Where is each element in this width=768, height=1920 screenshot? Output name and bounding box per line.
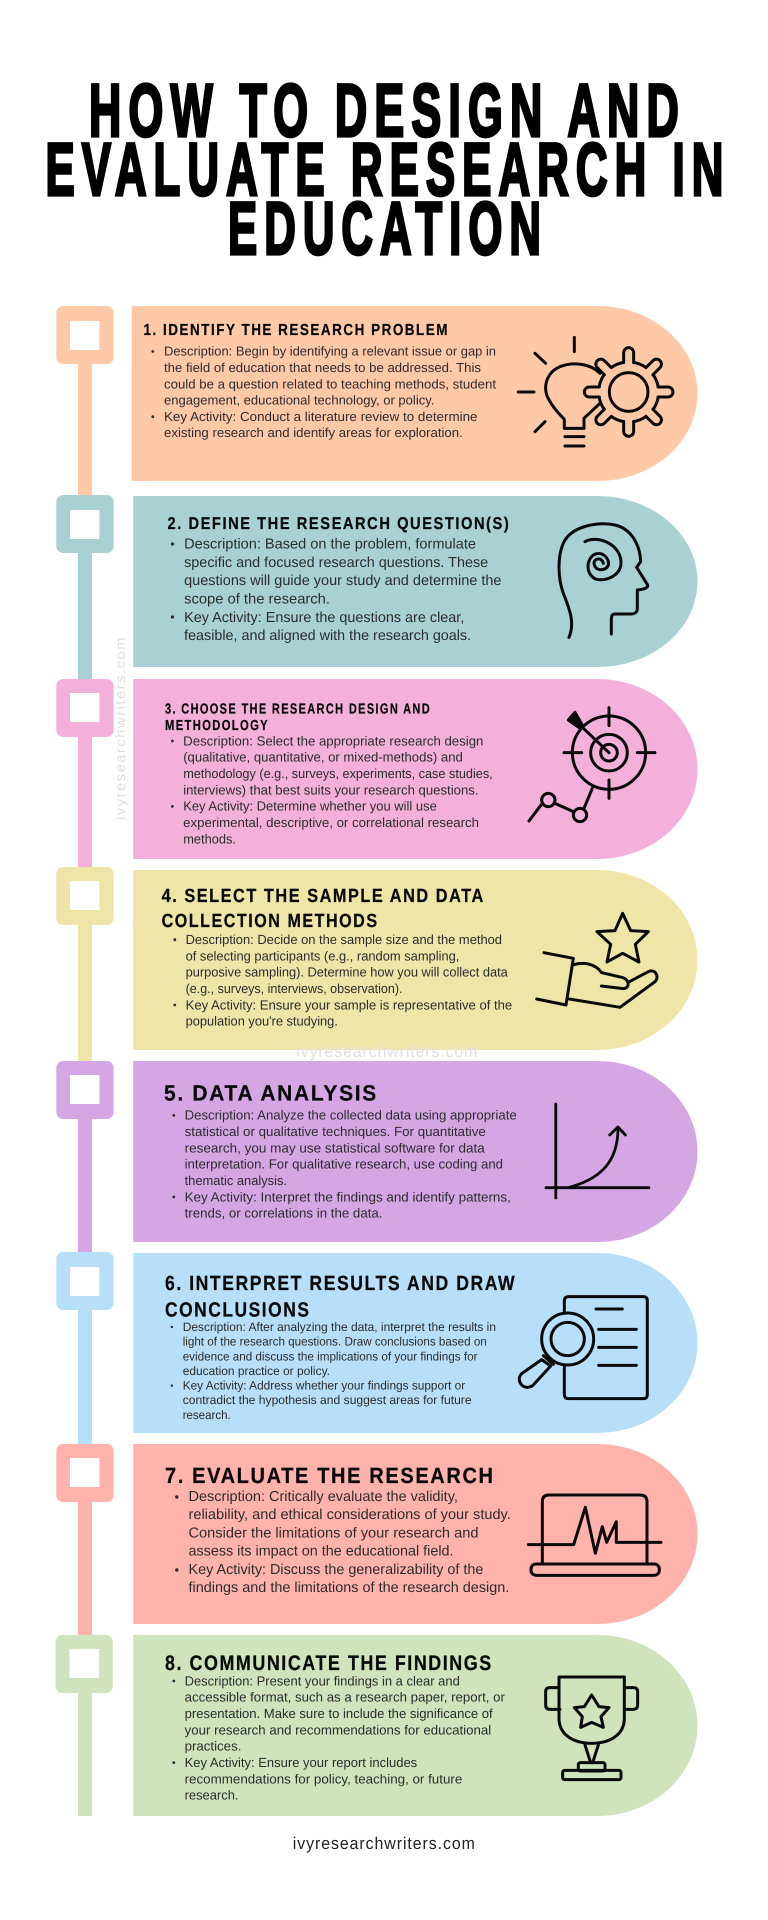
icon: head with spiral bbox=[559, 524, 648, 637]
panel: step 5 data analysis bbox=[133, 1061, 697, 1242]
text block: step 4: Key Activity: Ensure your sample is representative of the bbox=[186, 997, 512, 1012]
text block: step 6: Description: After analyzing the data, interpret the results in bbox=[183, 1320, 496, 1334]
text block: step 6: Key Activity: Address whether your findings support or bbox=[183, 1379, 465, 1393]
text block: step 2: Description: Based on the problem, formulate bbox=[184, 537, 476, 553]
heading: step 3: METHODOLOGY bbox=[165, 718, 269, 734]
heading: step 8: 8. COMMUNICATE THE FINDINGS bbox=[165, 1652, 493, 1675]
text block: step 4: Description: Decide on the sample size and the method bbox=[186, 932, 502, 947]
text block: step 6: evidence and discuss the implications of your findings for bbox=[183, 1349, 477, 1363]
panel: step 7 evaluate the research bbox=[133, 1444, 697, 1624]
heading: step 4 bbox=[162, 886, 485, 932]
icon: hand holding star bbox=[537, 913, 657, 1007]
text block: step 3: interviews) that best suits your research questions. bbox=[183, 782, 478, 797]
text block: step 4: of selecting participants (e.g., random sampling, bbox=[186, 948, 459, 963]
timeline bbox=[56, 306, 114, 1816]
heading: step 4: 4. SELECT THE SAMPLE AND DATA bbox=[162, 886, 485, 907]
text block: step 1: Key Activity: Conduct a literature review to determine bbox=[164, 409, 478, 424]
text block: step 5: statistical or qualitative techniques. For quantitative bbox=[185, 1124, 486, 1139]
text block: step 8: Key Activity: Ensure your report includes bbox=[185, 1755, 418, 1770]
icon: lightbulb and gear bbox=[518, 337, 673, 446]
heading: step 6: CONCLUSIONS bbox=[165, 1299, 310, 1322]
text block: step 6 bbox=[171, 1320, 496, 1422]
text block: step 7: findings and the limitations of the research design. bbox=[188, 1580, 509, 1596]
text block: step 7: Key Activity: Discuss the generalizability of the bbox=[188, 1562, 483, 1578]
panel: step 1 identify the research problem bbox=[132, 306, 697, 481]
text block: step 8 bbox=[172, 1673, 506, 1803]
text block: step 1 bbox=[151, 344, 496, 440]
panel: step 3 choose the research design and methodology bbox=[133, 679, 697, 859]
icon: laptop with pulse bbox=[528, 1495, 661, 1575]
text block: step 3: Key Activity: Determine whether you will use bbox=[183, 799, 437, 814]
text block: step 2: feasible, and aligned with the research goals. bbox=[184, 628, 471, 644]
text block: step 8: recommendations for policy, teaching, or future bbox=[185, 1771, 462, 1786]
text block: step 6: education practice or policy. bbox=[183, 1364, 330, 1378]
heading: step 3: 3. CHOOSE THE RESEARCH DESIGN AND bbox=[165, 702, 431, 718]
heading: step 5: 5. DATA ANALYSIS bbox=[164, 1081, 378, 1106]
title: EDUCATION bbox=[228, 187, 548, 270]
text block: step 5: trends, or correlations in the data. bbox=[185, 1206, 382, 1221]
text block: step 8: presentation. Make sure to include the significance of bbox=[185, 1706, 493, 1721]
text block: step 8: Description: Present your findings in a clear and bbox=[185, 1673, 460, 1688]
text block: step 3 bbox=[171, 733, 493, 846]
text block: step 8: accessible format, such as a research paper, report, or bbox=[185, 1690, 506, 1705]
text block: step 6: research. bbox=[183, 1408, 231, 1422]
text block: step 8: your research and recommendations for educational bbox=[185, 1722, 491, 1737]
text block: step 5: Description: Analyze the collected data using appropriate bbox=[185, 1108, 517, 1123]
text block: step 5: interpretation. For qualitative research, use coding and bbox=[185, 1157, 503, 1172]
text block: step 5: Key Activity: Interpret the findings and identify patterns, bbox=[185, 1189, 511, 1204]
icon: growth chart bbox=[546, 1104, 649, 1198]
text block: step 3: methodology (e.g., surveys, experiments, case studies, bbox=[183, 766, 493, 781]
heading: step 2: 2. DEFINE THE RESEARCH QUESTION(S) bbox=[168, 514, 510, 533]
heading: step 4: COLLECTION METHODS bbox=[162, 911, 379, 932]
text block: step 3: (qualitative, quantitative, or mixed-methods) and bbox=[183, 750, 463, 765]
icon: trophy with star bbox=[546, 1677, 638, 1780]
text block: step 7: reliability, and ethical considerations of your study. bbox=[188, 1507, 511, 1523]
text block: step 7: Description: Critically evaluate the validity, bbox=[188, 1489, 458, 1505]
text block: step 1: Description: Begin by identifying a relevant issue or gap in bbox=[164, 344, 496, 359]
text block: step 2: Key Activity: Ensure the questions are clear, bbox=[184, 610, 464, 626]
heading: step 7: 7. EVALUATE THE RESEARCH bbox=[165, 1463, 495, 1488]
text block: step 4: population you're studying. bbox=[186, 1014, 338, 1029]
text block: step 6: light of the research questions. Draw conclusions based on bbox=[183, 1335, 487, 1349]
text block: step 8: research. bbox=[185, 1788, 238, 1803]
icon: magnifier over document bbox=[519, 1297, 647, 1399]
text block: step 2 bbox=[171, 537, 502, 644]
text block: step 4: (e.g., surveys, interviews, observation). bbox=[186, 981, 402, 996]
text block: step 4 bbox=[173, 932, 512, 1029]
text block: step 1: the field of education that needs to be addressed. This bbox=[164, 360, 482, 375]
text block: step 2: specific and focused research questions. These bbox=[184, 555, 488, 571]
text block: step 3: Description: Select the appropriate research design bbox=[183, 733, 483, 748]
panel: step 6 interpret results and draw conclusions bbox=[133, 1253, 697, 1433]
text block: step 2: questions will guide your study and determine the bbox=[184, 573, 502, 589]
text block: step 6: contradict the hypothesis and suggest areas for future bbox=[183, 1393, 472, 1407]
text block: step 4: purposive sampling). Determine how you will collect data bbox=[186, 965, 508, 980]
text block: step 7: Consider the limitations of your research and bbox=[188, 1525, 478, 1541]
watermark: vertical: ivyresearchwriters.com bbox=[112, 636, 128, 820]
heading: step 1: 1. IDENTIFY THE RESEARCH PROBLEM bbox=[144, 322, 449, 339]
heading: step 6: 6. INTERPRET RESULTS AND DRAW bbox=[165, 1272, 516, 1295]
title bbox=[46, 69, 730, 270]
heading: step 3 bbox=[165, 702, 431, 734]
text block: step 8: practices. bbox=[185, 1739, 241, 1754]
text block: step 7: assess its impact on the educational field. bbox=[188, 1544, 454, 1560]
panel: step 2 define the research questions bbox=[133, 496, 697, 667]
text block: step 2: scope of the research. bbox=[184, 592, 330, 608]
icon: target with arrow and chart bbox=[529, 708, 655, 822]
heading: step 6 bbox=[165, 1272, 516, 1322]
text block: step 5 bbox=[172, 1108, 517, 1221]
panel: step 4 select the sample and data collection methods bbox=[133, 870, 697, 1050]
text block: step 5: thematic analysis. bbox=[185, 1173, 287, 1188]
text block: step 7 bbox=[175, 1489, 511, 1596]
text block: step 1: engagement, educational technology, or policy. bbox=[164, 393, 434, 408]
text block: step 1: existing research and identify areas for exploration. bbox=[164, 425, 463, 440]
text block: step 1: could be a question related to teaching methods, student bbox=[164, 376, 496, 391]
text block: step 5: research, you may use statistical software for data bbox=[185, 1140, 485, 1155]
panel: step 8 communicate the findings bbox=[133, 1635, 697, 1816]
text block: step 3: experimental, descriptive, or correlational research bbox=[183, 815, 479, 830]
text block: step 3: methods. bbox=[183, 831, 236, 846]
watermark: horizontal: ivyresearchwriters.com bbox=[296, 1041, 478, 1061]
footer: website: ivyresearchwriters.com bbox=[293, 1834, 476, 1853]
